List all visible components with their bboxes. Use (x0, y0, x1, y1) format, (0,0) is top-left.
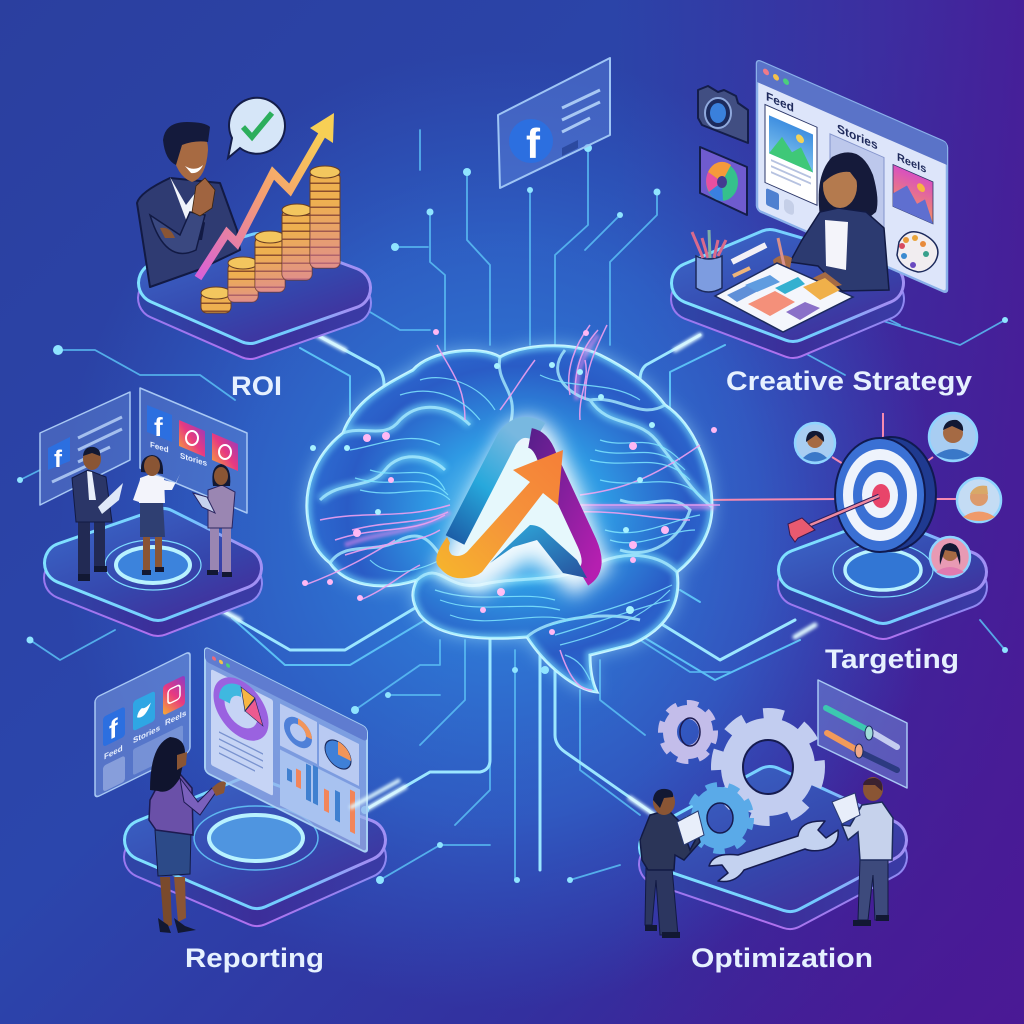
pink energy streams (345, 335, 715, 545)
card: social channels (95, 651, 190, 798)
platform ring (105, 540, 201, 590)
icon: palette (897, 232, 938, 272)
person: right manager (832, 777, 893, 926)
label: Optimization: Optimization (691, 943, 873, 973)
person: woman with tablet (193, 464, 235, 577)
window: Feed Stories Reels: Feed (766, 89, 794, 115)
card: channels: f (154, 412, 163, 442)
growth arrow (198, 113, 334, 278)
light beam (350, 780, 400, 808)
speech bubble (228, 98, 285, 158)
icon: small purple gear (662, 704, 714, 760)
panel: optimization scene (640, 680, 907, 938)
window: Feed Stories Reels (757, 60, 947, 293)
card: social channels: Feed (104, 743, 123, 761)
label: Targeting: Targeting (825, 644, 959, 674)
label: Creative Strategy: Creative Strategy (726, 366, 972, 396)
card: Facebook feed (40, 392, 130, 505)
platform: targeting (799, 539, 966, 618)
icon: camera (698, 86, 748, 143)
card: channels (140, 388, 247, 513)
design sheet (715, 263, 853, 332)
person: thinking man (137, 122, 240, 287)
coin stacks (201, 166, 340, 313)
panel: targeting scene (700, 413, 1001, 577)
icon: wrench (709, 821, 838, 882)
person: left manager (640, 789, 704, 938)
icon: aperture card (700, 147, 747, 215)
platform: reporting (145, 797, 365, 905)
window: Feed Stories Reels: Reels (897, 152, 926, 176)
panel: Facebook card: f (526, 120, 541, 167)
person: woman presenting (133, 455, 180, 575)
card: social channels: f (109, 712, 118, 746)
icon: target (835, 437, 936, 552)
window: Feed Stories Reels: Stories (837, 121, 878, 153)
platform: Creative Strategy (692, 250, 883, 337)
card: channels: Feed (150, 440, 169, 455)
panel: Creative Strategy scene (692, 60, 947, 332)
label: Reporting: Reporting (185, 943, 324, 973)
laser lines (700, 413, 957, 500)
icon: large gear (717, 714, 819, 820)
central brain (302, 325, 720, 692)
card: social channels: Reels (165, 708, 187, 728)
window: sliders (818, 680, 907, 788)
panel: reporting scene (95, 647, 400, 933)
icon: blue gear (690, 786, 750, 850)
label: ROI: ROI (231, 371, 282, 401)
card: social channels: Stories (133, 722, 160, 745)
logo (436, 426, 600, 585)
icon: pencil cup (692, 230, 766, 292)
person: man with tablet (72, 447, 123, 581)
card: Facebook feed: f (54, 446, 63, 473)
person: designer woman (773, 152, 889, 292)
platform: optimization (660, 787, 886, 908)
arrow (788, 496, 879, 542)
avatars (795, 413, 1001, 577)
inner glow of brain lobes (307, 346, 712, 692)
brain folds (320, 350, 712, 637)
card: channels: Stories (180, 451, 208, 468)
panel: ROI scene (137, 98, 340, 313)
panel: Facebook card (498, 58, 610, 188)
person: presenter woman (149, 737, 226, 933)
window: analytics dashboard (205, 647, 367, 853)
platform: team (65, 529, 241, 615)
circuit network (17, 130, 1008, 884)
platform: ROI (159, 254, 350, 338)
panel: team scene (40, 388, 247, 590)
